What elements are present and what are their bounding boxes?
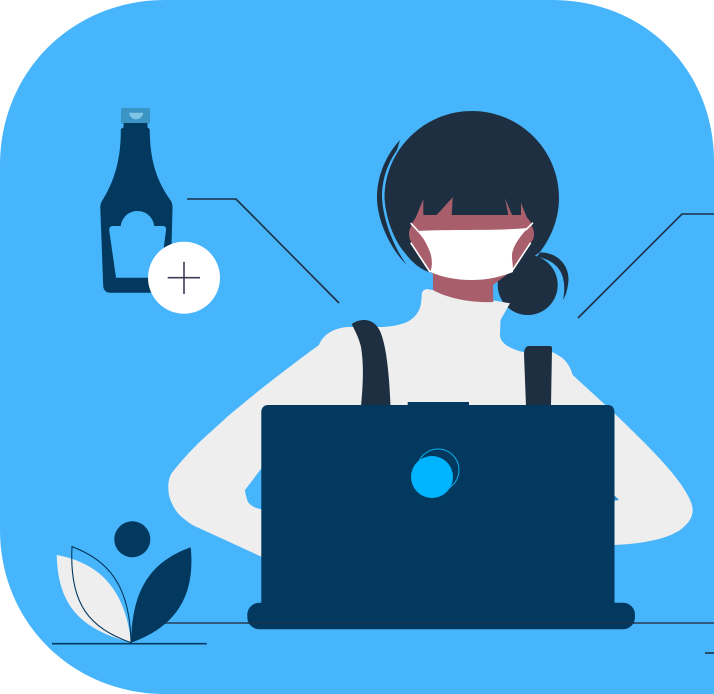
callout line: right: [578, 214, 714, 318]
hair: [384, 111, 559, 282]
bottle body: [100, 123, 172, 293]
strap right: [524, 346, 552, 406]
laptop: [247, 402, 635, 629]
ear left: [409, 225, 419, 243]
laptop base: [247, 603, 635, 629]
neck and face: [411, 197, 532, 302]
ground line over base: [247, 622, 635, 624]
ground line: [163, 622, 714, 624]
callout line: left: [187, 199, 339, 303]
arm gap left: [245, 465, 264, 510]
icon: sauce bottle: [100, 108, 220, 314]
arm gap right: [612, 493, 619, 501]
leaf outline: [72, 547, 131, 643]
plant: [52, 521, 207, 644]
plant dot: [114, 521, 150, 557]
woman: [168, 111, 693, 557]
plus badge: [148, 242, 220, 314]
bottle cap: [121, 108, 150, 124]
bottle label: [109, 211, 166, 278]
plant ground line: [52, 643, 207, 645]
laptop logo: [411, 449, 459, 498]
laptop screen: [261, 402, 614, 610]
strap left: [352, 320, 390, 406]
ground tick: [705, 652, 714, 654]
face mask: [411, 223, 533, 280]
hair strand: [377, 140, 407, 265]
leaf light: [57, 555, 131, 643]
sweater: [168, 289, 693, 557]
leaf dark: [131, 547, 191, 643]
ear right: [524, 225, 534, 243]
hair bun: [498, 252, 569, 315]
